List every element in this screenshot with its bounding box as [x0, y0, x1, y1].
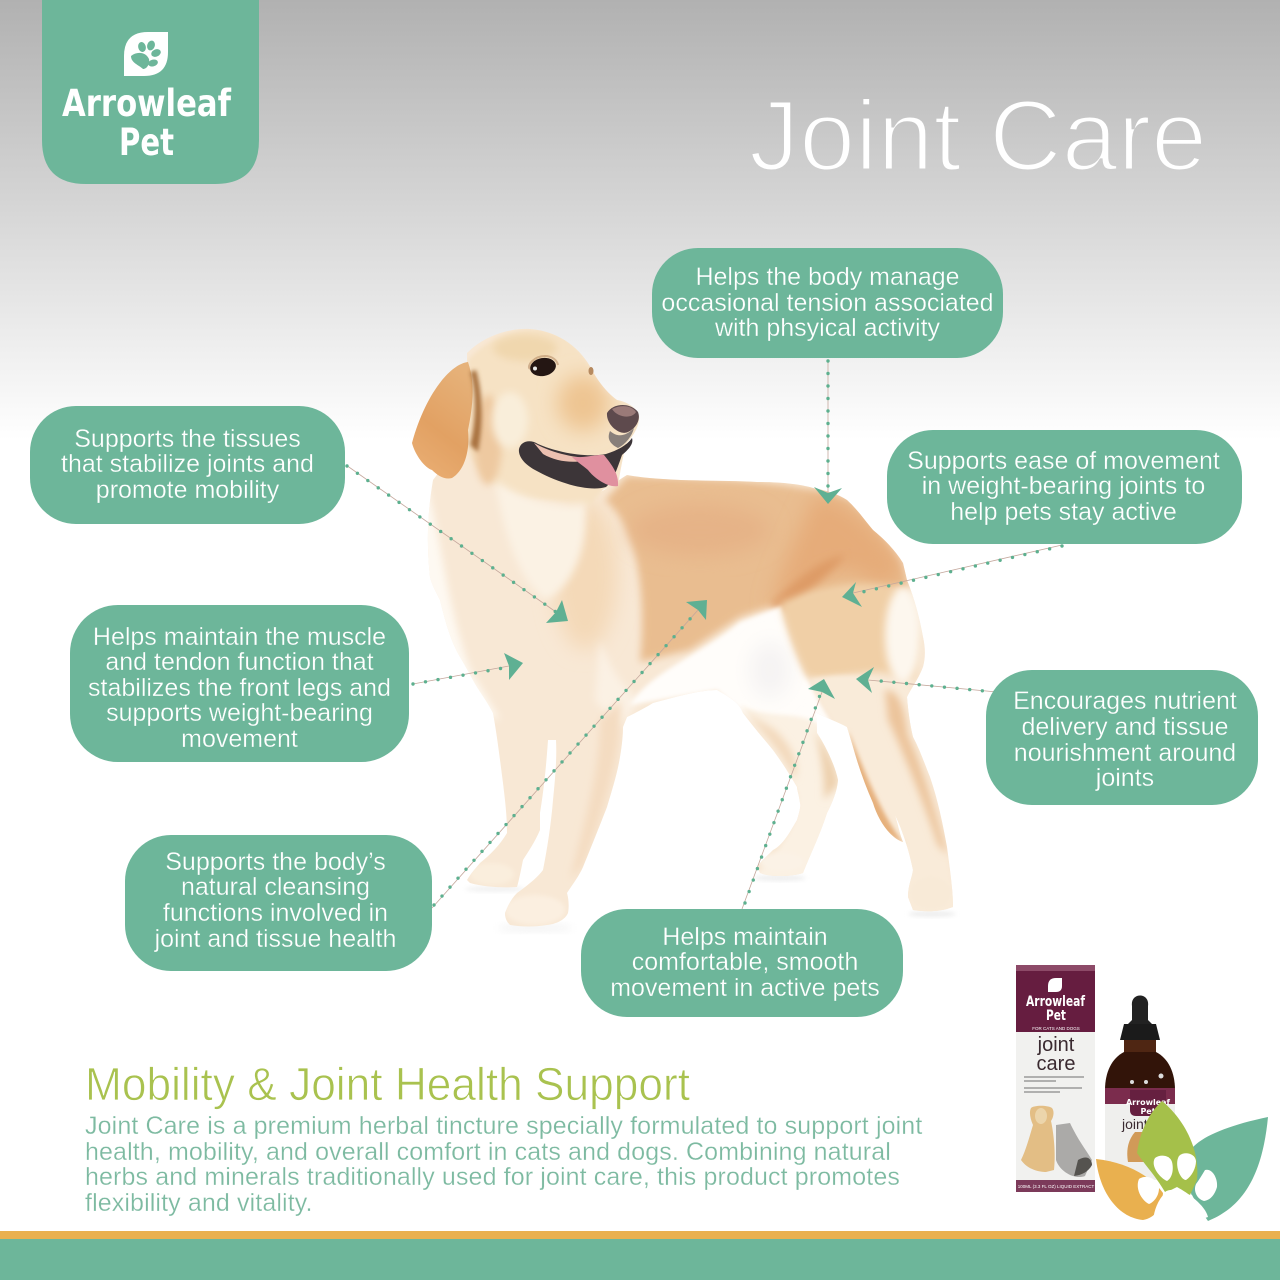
callout: ease of movement — [887, 430, 1242, 544]
arrow: comfort callout to hind leg — [742, 679, 835, 909]
callout: muscle and tendon: supports weight-bearing — [106, 699, 373, 727]
callout: muscle and tendon: Helps maintain the muscle — [93, 623, 386, 651]
callout: cleansing: functions involved in — [163, 899, 388, 927]
footer band — [0, 1231, 1280, 1280]
callout: tension: occasional tension associated — [661, 289, 994, 317]
callout: comfortable movement — [581, 909, 903, 1017]
dog body — [428, 329, 953, 926]
callout: tension: Helps the body manage — [695, 263, 960, 291]
callout: cleansing: Supports the body’s — [165, 848, 386, 876]
icon: paw leaf — [124, 32, 168, 76]
neck fur — [495, 480, 586, 600]
intro paragraph: health, mobility, and overall comfort in cats and dogs. Combining natural — [85, 1138, 891, 1166]
dropper bottle: Arrowleaf — [1126, 1098, 1171, 1107]
callout: comfortable movement: comfortable, smooth — [632, 948, 858, 976]
callout: nutrient delivery: delivery and tissue — [1021, 713, 1229, 741]
arrow: nutrient callout to knee — [856, 667, 997, 693]
dog photo illustration — [400, 320, 970, 940]
paws — [507, 896, 563, 924]
product box: joint — [1037, 1034, 1075, 1056]
callout: tension — [652, 248, 1003, 358]
callout: muscle and tendon: stabilizes the front legs and — [88, 674, 391, 702]
callout: tissues: Supports the tissues — [74, 425, 301, 453]
thigh — [780, 584, 920, 680]
logo wordmark — [62, 82, 232, 164]
section heading: Mobility & Joint Health Support — [85, 1058, 690, 1110]
callout: comfortable movement: Helps maintain — [662, 923, 828, 951]
tail feather — [849, 732, 903, 842]
arrow: ease of movement callout to hip — [842, 545, 1062, 607]
back and flank tan — [605, 476, 910, 662]
product box: Pet — [1046, 1008, 1066, 1024]
arrows — [346, 360, 1062, 909]
leaf trio logo — [1096, 1101, 1268, 1221]
callout: tension: with phsyical activity — [715, 314, 940, 342]
belly fur — [632, 604, 830, 724]
dropper bottle — [1105, 996, 1175, 1180]
logo wordmark: Pet — [119, 121, 174, 164]
eye — [529, 356, 557, 378]
callout: ease of movement: in weight-bearing joints to — [922, 472, 1205, 500]
rump orange fur — [770, 495, 908, 610]
callout: nutrient delivery: Encourages nutrient — [1013, 687, 1237, 715]
logo wordmark: Arrowleaf — [62, 82, 232, 125]
callout: comfortable movement: movement in active pets — [610, 974, 880, 1002]
product box: 100ML (3.3 FL OZ) LIQUID EXTRACT — [1018, 1184, 1094, 1189]
intro paragraph: herbs and minerals traditionally used for joint care, this product promotes — [85, 1163, 900, 1191]
dropper bottle: joint — [1121, 1116, 1148, 1132]
callout: nutrient delivery — [986, 670, 1258, 805]
arrow: cleansing callout to belly — [432, 600, 707, 908]
callout: muscle and tendon: and tendon function that — [105, 648, 374, 676]
head — [462, 330, 640, 505]
ear — [412, 362, 473, 479]
product box: Arrowleaf — [1026, 994, 1086, 1010]
intro paragraph: flexibility and vitality. — [85, 1189, 313, 1217]
nose — [607, 405, 639, 433]
callout: nutrient delivery: joints — [1096, 764, 1154, 792]
callout: muscle and tendon — [70, 605, 409, 762]
logo badge — [42, 0, 259, 184]
product box: care — [1037, 1053, 1075, 1075]
callout: muscle and tendon: movement — [181, 725, 298, 753]
callout: tissues — [30, 406, 345, 524]
callout: cleansing: natural cleansing — [181, 873, 370, 901]
ground shadow — [465, 875, 956, 932]
front leg — [570, 700, 621, 880]
callout: ease of movement: Supports ease of movement — [907, 447, 1220, 475]
callout: tissues: that stabilize joints and — [61, 450, 314, 478]
arrow: top callout to back — [814, 360, 842, 504]
mouth — [519, 438, 632, 488]
callout: nutrient delivery: nourishment around — [1014, 738, 1236, 766]
callout: tissues: promote mobility — [96, 476, 279, 504]
product packaging — [1016, 965, 1268, 1221]
hind leg — [813, 674, 912, 892]
dropper bottle: Pet — [1140, 1107, 1156, 1116]
callout: ease of movement: help pets stay active — [950, 498, 1177, 526]
intro paragraph — [85, 1112, 922, 1217]
arrow: muscle callout to front leg — [413, 653, 523, 684]
arrow: tissues callout to chest — [346, 465, 568, 623]
product box — [1016, 965, 1095, 1192]
callout: cleansing: joint and tissue health — [155, 925, 396, 953]
intro paragraph: Joint Care is a premium herbal tincture specially formulated to support joint — [85, 1112, 922, 1140]
product box: FOR CATS AND DOGS — [1032, 1026, 1080, 1031]
callout: cleansing — [125, 835, 432, 971]
far hind leg — [740, 705, 839, 880]
title: Joint Care — [749, 80, 1207, 192]
chest fur — [428, 496, 498, 719]
